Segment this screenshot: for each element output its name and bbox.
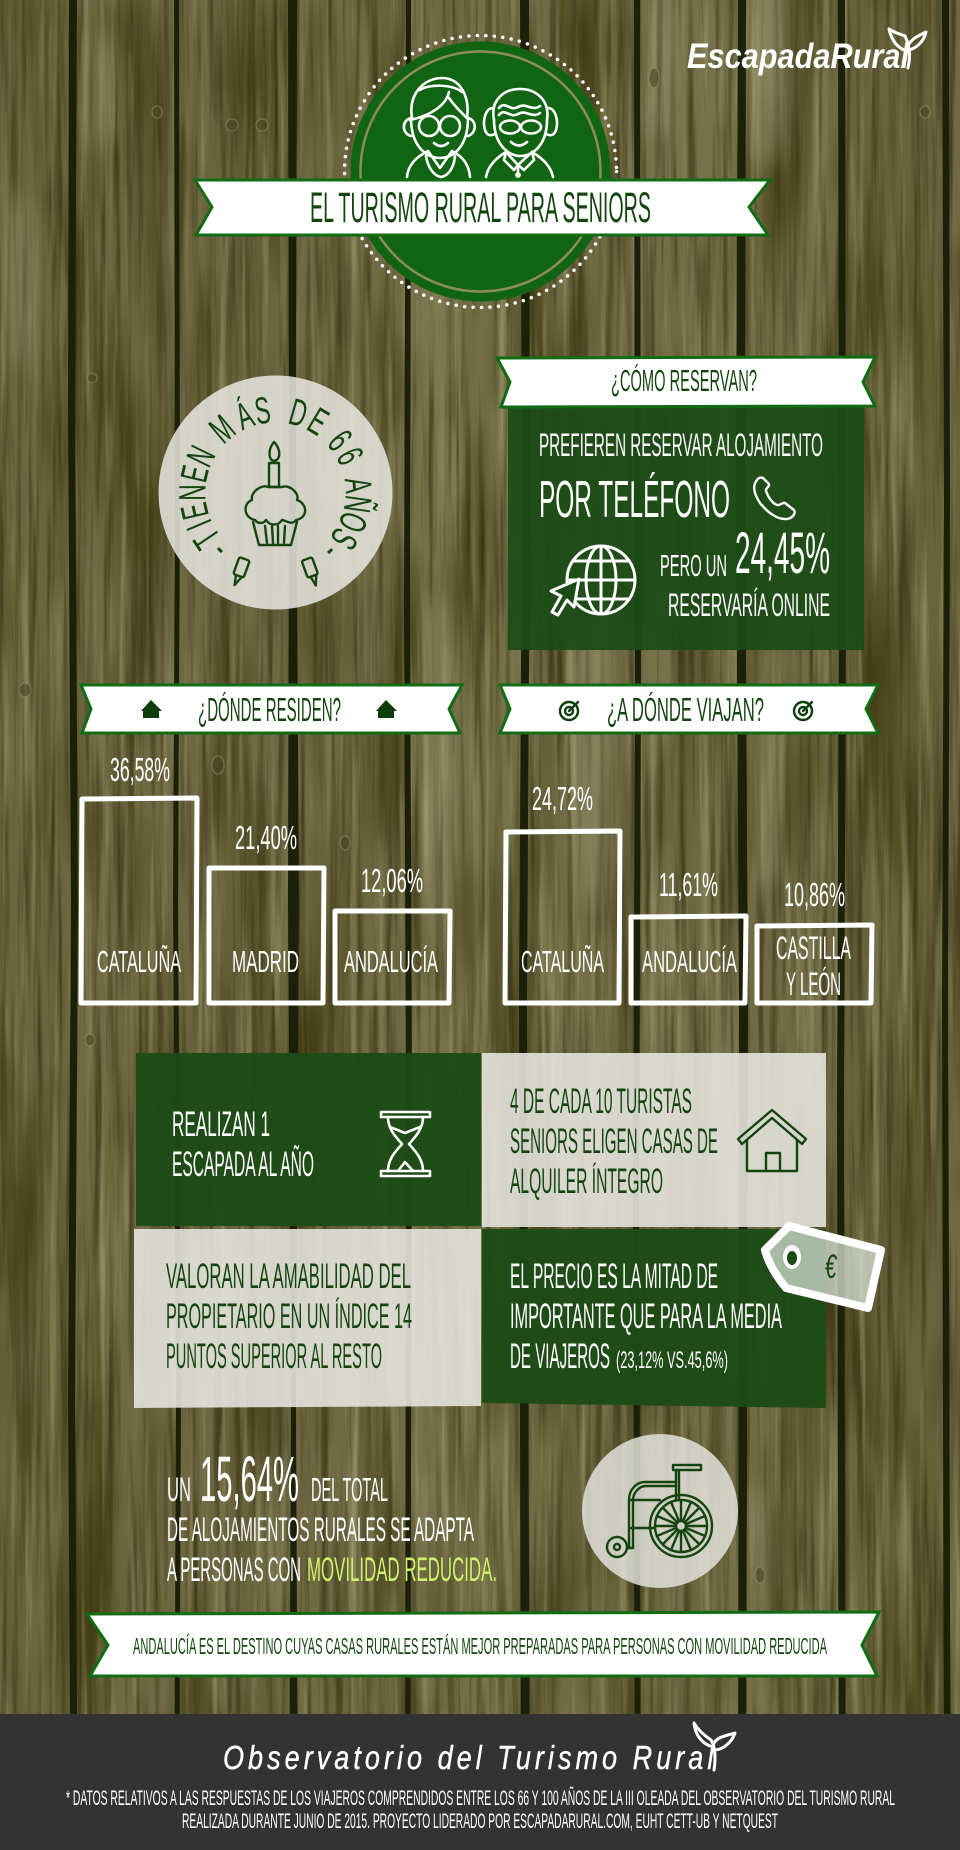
text: adapted lodgings: 15,64% [200, 1443, 299, 1515]
curved heading: age: N [178, 440, 224, 473]
ribbon: Andalucia note [87, 1612, 879, 1676]
curved heading: age: D [285, 390, 312, 436]
icon: house [141, 700, 162, 718]
curved heading: age: E [301, 399, 336, 444]
icon: price tag [765, 1226, 881, 1308]
curved heading: age: - [201, 534, 236, 570]
heading: a donde viajan: ¿A DÓNDE VIAJAN? [607, 691, 764, 728]
panel: price importance [482, 1226, 881, 1408]
bar: Cataluna [505, 780, 620, 1003]
bar: Cataluna [81, 751, 197, 1003]
bar: Castilla y Leon: 10,86% [784, 876, 845, 913]
ribbon: a donde viajan [500, 685, 878, 733]
icon: phone [754, 478, 795, 519]
bar: Andalucia: 11,61% [659, 866, 718, 903]
icon: price tag: € [825, 1248, 837, 1285]
text: MOVILIDAD REDUCIDA. [307, 1551, 497, 1589]
title badge: seniors [344, 36, 616, 308]
curved heading: age: M [201, 407, 243, 451]
panel: how they book: PERO UN [660, 548, 727, 583]
ribbon: donde residen [81, 685, 462, 733]
curved heading: age: E [172, 462, 217, 486]
curved heading: age: T [185, 521, 228, 556]
bar: Andalucia: ANDALUCÍA [344, 944, 438, 979]
circle: wheelchair [582, 1434, 738, 1588]
curved heading: age: E [172, 499, 217, 523]
curved heading: age: S [322, 521, 366, 557]
bar: Andalucia: ANDALUCÍA [642, 944, 737, 979]
ribbon: donde residen: ¿DÓNDE RESIDEN? [198, 691, 341, 728]
curved heading: age: 6 [328, 441, 372, 471]
panel: whole-rental houses: ALQUILER ÍNTEGRO [510, 1162, 663, 1201]
ribbon: como reservan [497, 357, 875, 407]
text: adapted lodgings: UN [167, 1471, 191, 1509]
icon: small candle left [230, 557, 250, 587]
panel: how they book: POR TELÉFONO [539, 471, 730, 529]
bar: Madrid: MADRID [232, 944, 299, 979]
panel: host friendliness: VALORAN LA AMABILIDAD DEL [166, 1257, 411, 1296]
panel: price importance: DE VIAJEROS [510, 1337, 610, 1376]
title ribbon [195, 180, 770, 235]
curved heading: age: - [315, 535, 349, 571]
icon: target [794, 702, 812, 720]
bar: Andalucia: 12,06% [361, 862, 423, 899]
footer heading: Observatorio del Turismo Rural [223, 1741, 715, 1777]
icon: sprout [694, 1723, 735, 1770]
icon: cupcake with candle [246, 442, 305, 545]
curved heading: age: Á [230, 393, 260, 438]
bar chart: where they travel [505, 780, 872, 1003]
panel: one trip a year: REALIZAN 1 [172, 1105, 270, 1144]
panel: how they book: ¿CÓMO RESERVAN? [611, 363, 757, 398]
icon: hourglass [381, 1112, 430, 1176]
icon: small candle right [302, 557, 321, 587]
curved heading: age: N [172, 484, 214, 501]
text: adapted lodgings [167, 1443, 497, 1589]
icon: target [560, 702, 578, 720]
bar: Madrid [209, 819, 324, 1003]
bar: Cataluna: 36,58% [110, 751, 170, 788]
curved heading: age [172, 389, 380, 571]
panel: how they book: 24,45% [735, 521, 830, 586]
icon: senior woman [404, 78, 475, 177]
curved heading: age: I [179, 514, 220, 536]
bar: Madrid: 21,40% [235, 819, 297, 856]
panel: host friendliness: PROPIETARIO EN UN ÍNDICE 14 [166, 1297, 412, 1336]
curved heading: age: S [252, 389, 273, 433]
panel: host friendliness [134, 1229, 481, 1408]
bar: Castilla y Leon: Y LEÓN [786, 966, 841, 1002]
bar chart: where they live [81, 751, 450, 1003]
panel: host friendliness: PUNTOS SUPERIOR AL RESTO [166, 1337, 382, 1376]
text: adapted lodgings: DEL TOTAL [311, 1471, 388, 1508]
circle: age over 66 [158, 376, 392, 610]
icon: globe with cursor [551, 546, 635, 615]
curved heading: age: O [330, 506, 376, 538]
icon: house [376, 700, 397, 718]
footer panel [0, 1714, 960, 1850]
text: DE ALOJAMIENTOS RURALES SE ADAPTA [167, 1511, 474, 1549]
panel: one trip a year: ESCAPADA AL AÑO [172, 1145, 314, 1184]
panel: price importance: (23,12% VS.45,6%) [616, 1347, 728, 1374]
icon: wheelchair [607, 1465, 712, 1557]
panel: whole-rental houses: 4 DE CADA 10 TURISTAS [510, 1082, 692, 1121]
curved heading: age: Ñ [335, 493, 380, 515]
panel: whole-rental houses [482, 1053, 826, 1227]
bar: Cataluna: 24,72% [532, 780, 593, 817]
curved heading: age: 6 [319, 422, 360, 459]
bar: Castilla y Leon [757, 876, 872, 1003]
text: adapted lodgings: A PERSONAS CON [167, 1551, 301, 1589]
icon: senior man [484, 89, 557, 177]
panel: one trip a year [136, 1053, 481, 1226]
bar: Andalucia [335, 862, 450, 1003]
curved heading: age: A [336, 476, 380, 495]
bar: Castilla y Leon: CASTILLA [776, 930, 851, 966]
bar: Cataluna: CATALUÑA [521, 944, 604, 979]
logo: EscapadaRural: EscapadaRural [687, 37, 910, 76]
bar: Cataluna: CATALUÑA [97, 944, 181, 979]
panel: how they book [497, 357, 875, 650]
icon: house outline [738, 1110, 806, 1171]
bar: Andalucia [631, 866, 746, 1003]
